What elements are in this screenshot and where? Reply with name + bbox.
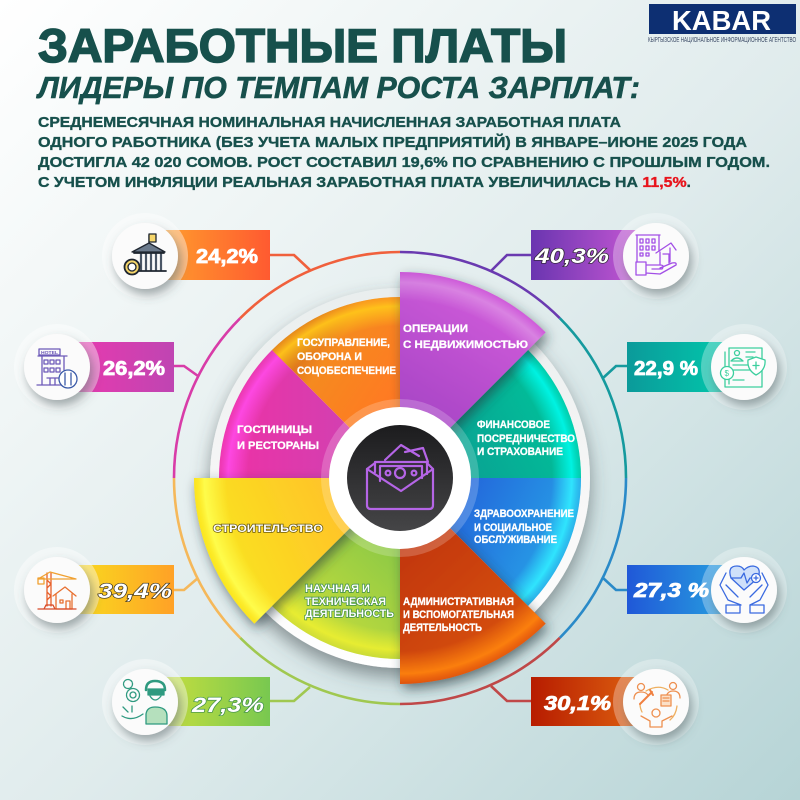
label: административная <box>403 596 514 634</box>
label: госуправление: ОБОРОНА И <box>297 351 362 363</box>
callout: 26,2% гостиницы: 26,2% <box>103 358 165 380</box>
label: научная и техническая: ТЕХНИЧЕСКАЯ <box>305 596 386 608</box>
slice: гостиницы и рестораны <box>219 350 400 478</box>
slice: здравоохранение <box>400 478 581 606</box>
label: научная и техническая: НАУЧНАЯ И <box>305 583 370 595</box>
icon: hotel: HOTEL <box>41 350 58 355</box>
label: финансовое посредничество: И СТРАХОВАНИЕ <box>477 446 563 458</box>
callout: 27,3% наука: 27,3% <box>191 694 264 717</box>
title: ЗАРАБОТНЫЕ ПЛАТЫ <box>38 19 567 72</box>
icon: buildings on hand <box>636 235 676 275</box>
intro text block: ОДНОГО РАБОТНИКА (БЕЗ УЧЕТА МАЛЫХ ПРЕДПРИЯТИЙ) В ЯНВАРЕ–ИЮНЕ 2025 ГОДА <box>38 133 747 151</box>
slice: финансовое посредничество <box>400 350 581 478</box>
callout: 30,1% административная <box>531 659 699 745</box>
slice: научная и техническая деятельность <box>272 478 400 659</box>
slice: административная деятельность <box>400 478 546 684</box>
icon: insurance document <box>720 348 765 387</box>
label: гостиницы и рестораны <box>237 424 319 452</box>
label: госуправление: СОЦОБЕСПЕЧЕНИЕ <box>297 365 396 377</box>
label: здравоохранение <box>474 508 574 546</box>
slice: операции с недвижимостью <box>400 272 546 478</box>
callout: 40,3% недвижимость <box>531 213 699 299</box>
label: административная: ДЕЯТЕЛЬНОСТЬ <box>403 622 482 634</box>
label: здравоохранение: ОБСЛУЖИВАНИЕ <box>474 534 557 546</box>
icon: scientist with gears <box>122 680 167 724</box>
label: здравоохранение: ЗДРАВООХРАНЕНИЕ <box>474 508 574 520</box>
callout: 22,9% финансы <box>627 324 787 410</box>
label: научная и техническая: ДЕЯТЕЛЬНОСТЬ <box>305 608 394 620</box>
callout: 24,2% госуправление <box>102 213 270 299</box>
callout: 30,1% административная: 30,1% <box>544 693 611 715</box>
icon: government building with gear <box>124 234 166 274</box>
label: финансовое посредничество: ФИНАНСОВОЕ <box>477 419 550 431</box>
callout: 22,9% финансы: 22,9 % <box>634 358 698 380</box>
logo: KABAR: KABAR <box>672 5 771 36</box>
callout: 24,2% госуправление: 24,2% <box>196 246 258 268</box>
callout: 27,3% здравоохранение: 27,3 % <box>633 580 709 602</box>
label: здравоохранение: И СОЦИАЛЬНОЕ <box>474 522 552 534</box>
callout: 27,3% здравоохранение <box>627 547 787 633</box>
pie chart <box>194 272 590 684</box>
label: госуправление <box>297 337 396 377</box>
callout: 40,3% недвижимость: 40,3% <box>534 245 609 268</box>
label: операции с недвижимостью <box>403 323 528 351</box>
icon: crane and house <box>38 572 76 609</box>
outer colour ring <box>174 252 626 704</box>
label: строительство: СТРОИТЕЛЬСТВО <box>213 523 323 535</box>
icon: hands holding heart <box>720 566 768 613</box>
icon: hotel <box>37 349 77 388</box>
callout: 39,4% строительство <box>14 547 174 633</box>
intro text block: С УЧЕТОМ ИНФЛЯЦИИ РЕАЛЬНАЯ ЗАРАБОТНАЯ ПЛАТА УВЕЛИЧИЛАСЬ НА 11,5%. <box>38 175 691 191</box>
intro text block <box>38 115 770 191</box>
label: госуправление: ГОСУПРАВЛЕНИЕ, <box>297 337 390 349</box>
slice: строительство <box>194 478 400 624</box>
callout: 27,3% наука <box>102 659 270 745</box>
label: административная: И ВСПОМОГАТЕЛЬНАЯ <box>403 609 514 621</box>
label: гостиницы и рестораны: ГОСТИНИЦЫ <box>237 424 312 436</box>
callout: 39,4% строительство: 39,4% <box>98 580 172 603</box>
icon: insurance document: $ <box>724 369 730 378</box>
label: операции с недвижимостью: ОПЕРАЦИИ <box>403 323 468 335</box>
icon: team cycle <box>634 682 680 727</box>
centre icon: envelope with money <box>329 407 471 549</box>
label: операции с недвижимостью: С НЕДВИЖИМОСТЬЮ <box>403 339 528 351</box>
label: финансовое посредничество: ПОСРЕДНИЧЕСТВО <box>477 433 575 445</box>
callout: 26,2% гостиницы <box>14 324 174 410</box>
intro text block: СРЕДНЕМЕСЯЧНАЯ НОМИНАЛЬНАЯ НАЧИСЛЕННАЯ ЗАРАБОТНАЯ ПЛАТА <box>38 115 621 131</box>
label: научная и техническая <box>305 583 394 620</box>
slice labels <box>213 323 575 634</box>
slice: госуправление <box>272 297 400 478</box>
label: административная: АДМИНИСТРАТИВНАЯ <box>403 596 514 608</box>
logo: KABAR <box>648 4 796 44</box>
subtitle: ЛИДЕРЫ ПО ТЕМПАМ РОСТА ЗАРПЛАТ: <box>36 70 640 105</box>
label: гостиницы и рестораны: И РЕСТОРАНЫ <box>237 440 319 452</box>
connector lines <box>174 255 627 701</box>
label: финансовое посредничество <box>477 419 575 458</box>
intro text block: ДОСТИГЛА 42 020 СОМОВ. РОСТ СОСТАВИЛ 19,6% ПО СРАВНЕНИЮ С ПРОШЛЫМ ГОДОМ. <box>38 155 770 171</box>
